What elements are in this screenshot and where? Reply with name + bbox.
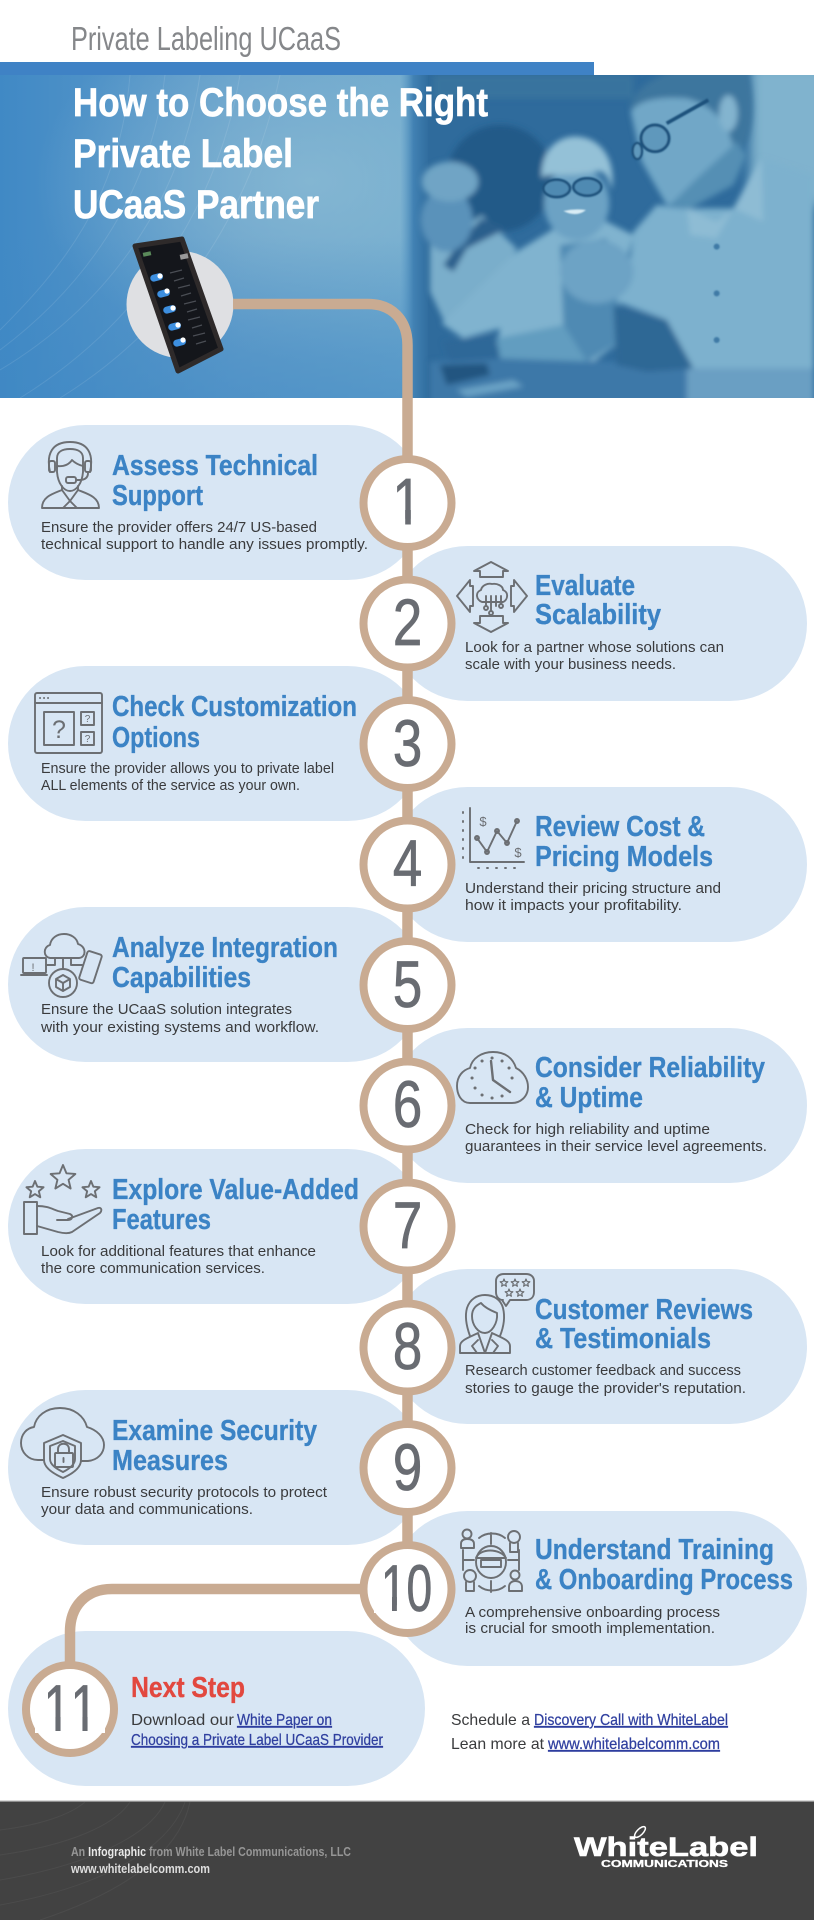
- heading: [535, 1294, 753, 1355]
- number 10: 10: [381, 1552, 432, 1626]
- icon: browser window with question marks: ?: [85, 714, 91, 725]
- body text: stories to gauge the provider's reputation.: [465, 1381, 746, 1397]
- panel: step 5 integration: [8, 907, 425, 1062]
- footer credit: An Infographic from White Label Communications, LLC: [71, 1845, 351, 1859]
- body text: [41, 1485, 327, 1518]
- panel: step 3 customization: [8, 666, 425, 821]
- heading: Analyze Integration: [112, 932, 338, 964]
- panel: step 8 reviews: [390, 1269, 807, 1424]
- body text: is crucial for smooth implementation.: [465, 1621, 715, 1637]
- body text: [41, 761, 334, 794]
- hero title: UCaaS Partner: [73, 183, 319, 227]
- heading: Support: [112, 480, 203, 512]
- icon: browser window with question marks: [35, 693, 102, 753]
- number 4: [364, 820, 452, 908]
- heading: [112, 691, 357, 754]
- panel: step 10 onboarding: [390, 1511, 807, 1666]
- logo: COMMUNICATIONS: [601, 1859, 728, 1870]
- heading: Check Customization: [112, 691, 357, 723]
- body text: guarantees in their service level agreements.: [465, 1139, 767, 1155]
- number 2: [364, 580, 452, 668]
- heading: [535, 811, 713, 873]
- body text: [465, 881, 721, 914]
- heading: Explore Value-Added: [112, 1174, 359, 1206]
- icon: cloud clock: [457, 1052, 528, 1103]
- panel: step 7 value-added features: [8, 1149, 425, 1304]
- body text: your data and communications.: [41, 1502, 253, 1518]
- panel: step 1 technical support: [8, 425, 425, 580]
- number 8: 8: [393, 1309, 422, 1383]
- number 1: 1: [392, 465, 422, 539]
- hero banner: [0, 65, 814, 403]
- heading: Scalability: [535, 599, 661, 631]
- heading: [535, 1052, 765, 1114]
- body text: [41, 1244, 316, 1277]
- heading: next step: Next Step: [131, 1672, 245, 1704]
- body text: Look for additional features that enhance: [41, 1244, 316, 1260]
- panel: step 2 scalability: [390, 546, 807, 701]
- icon: cloud connected devices: !: [31, 962, 35, 974]
- call to action links: Discovery Call with WhiteLabel: [534, 1712, 728, 1729]
- heading: Options: [112, 722, 200, 754]
- heading: & Uptime: [535, 1082, 643, 1114]
- heading: Consider Reliability: [535, 1052, 765, 1084]
- man right: [614, 198, 814, 372]
- number 7: [364, 1182, 452, 1270]
- call to action links: Schedule a: [451, 1712, 530, 1729]
- body text: [40, 1002, 319, 1036]
- number 3: [364, 700, 452, 788]
- white paper download text: Download our: [131, 1712, 235, 1729]
- panel: step 11 next step: [8, 1631, 425, 1786]
- white paper download text: White Paper on: [237, 1712, 332, 1729]
- number 9: [364, 1424, 452, 1512]
- number 11: 11: [44, 1673, 98, 1746]
- table: [431, 358, 688, 398]
- icon: cloud with lock shield: [21, 1408, 104, 1478]
- body text: the core communication services.: [41, 1261, 265, 1277]
- heading: [112, 450, 318, 512]
- icon: headset agent: [42, 442, 99, 508]
- body text: ALL elements of the service as your own.: [41, 778, 300, 794]
- icon: browser window with question marks: ?: [52, 716, 66, 744]
- number 9: 9: [393, 1430, 422, 1504]
- number 1: [364, 459, 452, 547]
- older man: [430, 215, 517, 323]
- body text: Ensure robust security protocols to protect: [41, 1485, 327, 1501]
- hero photo: [400, 65, 814, 403]
- footer band: [0, 1800, 814, 1920]
- body text: [465, 1605, 720, 1637]
- call to action links: Lean more at: [451, 1736, 545, 1753]
- icon: phone on circle: [126, 239, 234, 371]
- icon: cloud connected devices: [21, 934, 102, 997]
- panel: step 9 security: [8, 1390, 425, 1545]
- icon: stars over open hand: [24, 1165, 101, 1234]
- eyebrow heading: Private Labeling UCaaS: [71, 20, 341, 57]
- body text: Ensure the provider allows you to private label: [41, 761, 334, 777]
- blue accent bar: [0, 62, 594, 76]
- hero title: [73, 81, 488, 227]
- heading: Examine Security: [112, 1415, 317, 1447]
- number 6: 6: [393, 1067, 422, 1141]
- icon: trainee with certificates: [461, 1530, 522, 1592]
- icon: pricing chart: $: [479, 814, 487, 829]
- body text: Look for a partner whose solutions can: [465, 640, 724, 656]
- heading: [535, 1534, 793, 1596]
- heading: Features: [112, 1204, 211, 1236]
- number 2: 2: [393, 585, 422, 659]
- body text: technical support to handle any issues promptly.: [41, 537, 368, 553]
- number 5: 5: [393, 947, 422, 1021]
- number 4: 4: [393, 826, 422, 900]
- body text: with your existing systems and workflow.: [40, 1020, 319, 1036]
- footer credit: [70, 1845, 351, 1876]
- number 8: [364, 1304, 452, 1392]
- body text: A comprehensive onboarding process: [465, 1605, 720, 1621]
- panel: step 6 reliability: [390, 1028, 807, 1183]
- body text: Ensure the provider offers 24/7 US-based: [41, 520, 317, 536]
- number 7: 7: [393, 1188, 422, 1262]
- heading: Review Cost &: [535, 811, 705, 843]
- body text: scale with your business needs.: [465, 657, 676, 673]
- number 3: 3: [393, 706, 422, 780]
- heading: Evaluate: [535, 570, 635, 602]
- body text: Ensure the UCaaS solution integrates: [41, 1002, 292, 1018]
- body text: [465, 1122, 767, 1155]
- hero title: How to Choose the Right: [73, 81, 488, 125]
- heading: & Testimonials: [535, 1323, 711, 1355]
- heading: Customer Reviews: [535, 1294, 753, 1326]
- number 5: [364, 941, 452, 1029]
- icon: pricing chart: [463, 808, 524, 868]
- body text: Check for high reliability and uptime: [465, 1122, 710, 1138]
- body text: how it impacts your profitability.: [465, 898, 682, 914]
- heading: [535, 570, 661, 631]
- body text: [465, 1363, 746, 1397]
- heading: [112, 932, 338, 994]
- icon: customer with rating bubble: [460, 1274, 534, 1353]
- connector path: [70, 304, 408, 1670]
- heading: Understand Training: [535, 1534, 774, 1566]
- body text: [465, 640, 724, 673]
- heading: Assess Technical: [112, 450, 318, 482]
- panel: step 4 pricing: [390, 787, 807, 942]
- heading: [112, 1174, 359, 1236]
- woman body: [442, 222, 633, 362]
- call to action links: [451, 1712, 728, 1753]
- number 10: [364, 1545, 452, 1633]
- number 6: [364, 1062, 452, 1150]
- footer credit: www.whitelabelcomm.com: [70, 1862, 210, 1876]
- icon: pricing chart: $: [514, 845, 522, 860]
- white paper download text: [131, 1712, 384, 1749]
- number 11: [26, 1665, 114, 1753]
- heading: Pricing Models: [535, 841, 713, 873]
- heading: Measures: [112, 1445, 228, 1477]
- heading: Capabilities: [112, 962, 251, 994]
- call to action links: www.whitelabelcomm.com: [547, 1736, 720, 1753]
- body text: Understand their pricing structure and: [465, 881, 721, 897]
- body text: [41, 520, 368, 553]
- heading: [112, 1415, 317, 1477]
- hero title: Private Label: [73, 132, 293, 176]
- white paper download text: Choosing a Private Label UCaaS Provider: [131, 1732, 384, 1749]
- logo: WhiteLabel: [574, 1832, 758, 1862]
- icon: browser window with question marks: ?: [85, 734, 91, 745]
- logo: [574, 1825, 758, 1870]
- body text: Research customer feedback and success: [465, 1363, 741, 1379]
- icon: cloud with four arrows: [457, 562, 527, 632]
